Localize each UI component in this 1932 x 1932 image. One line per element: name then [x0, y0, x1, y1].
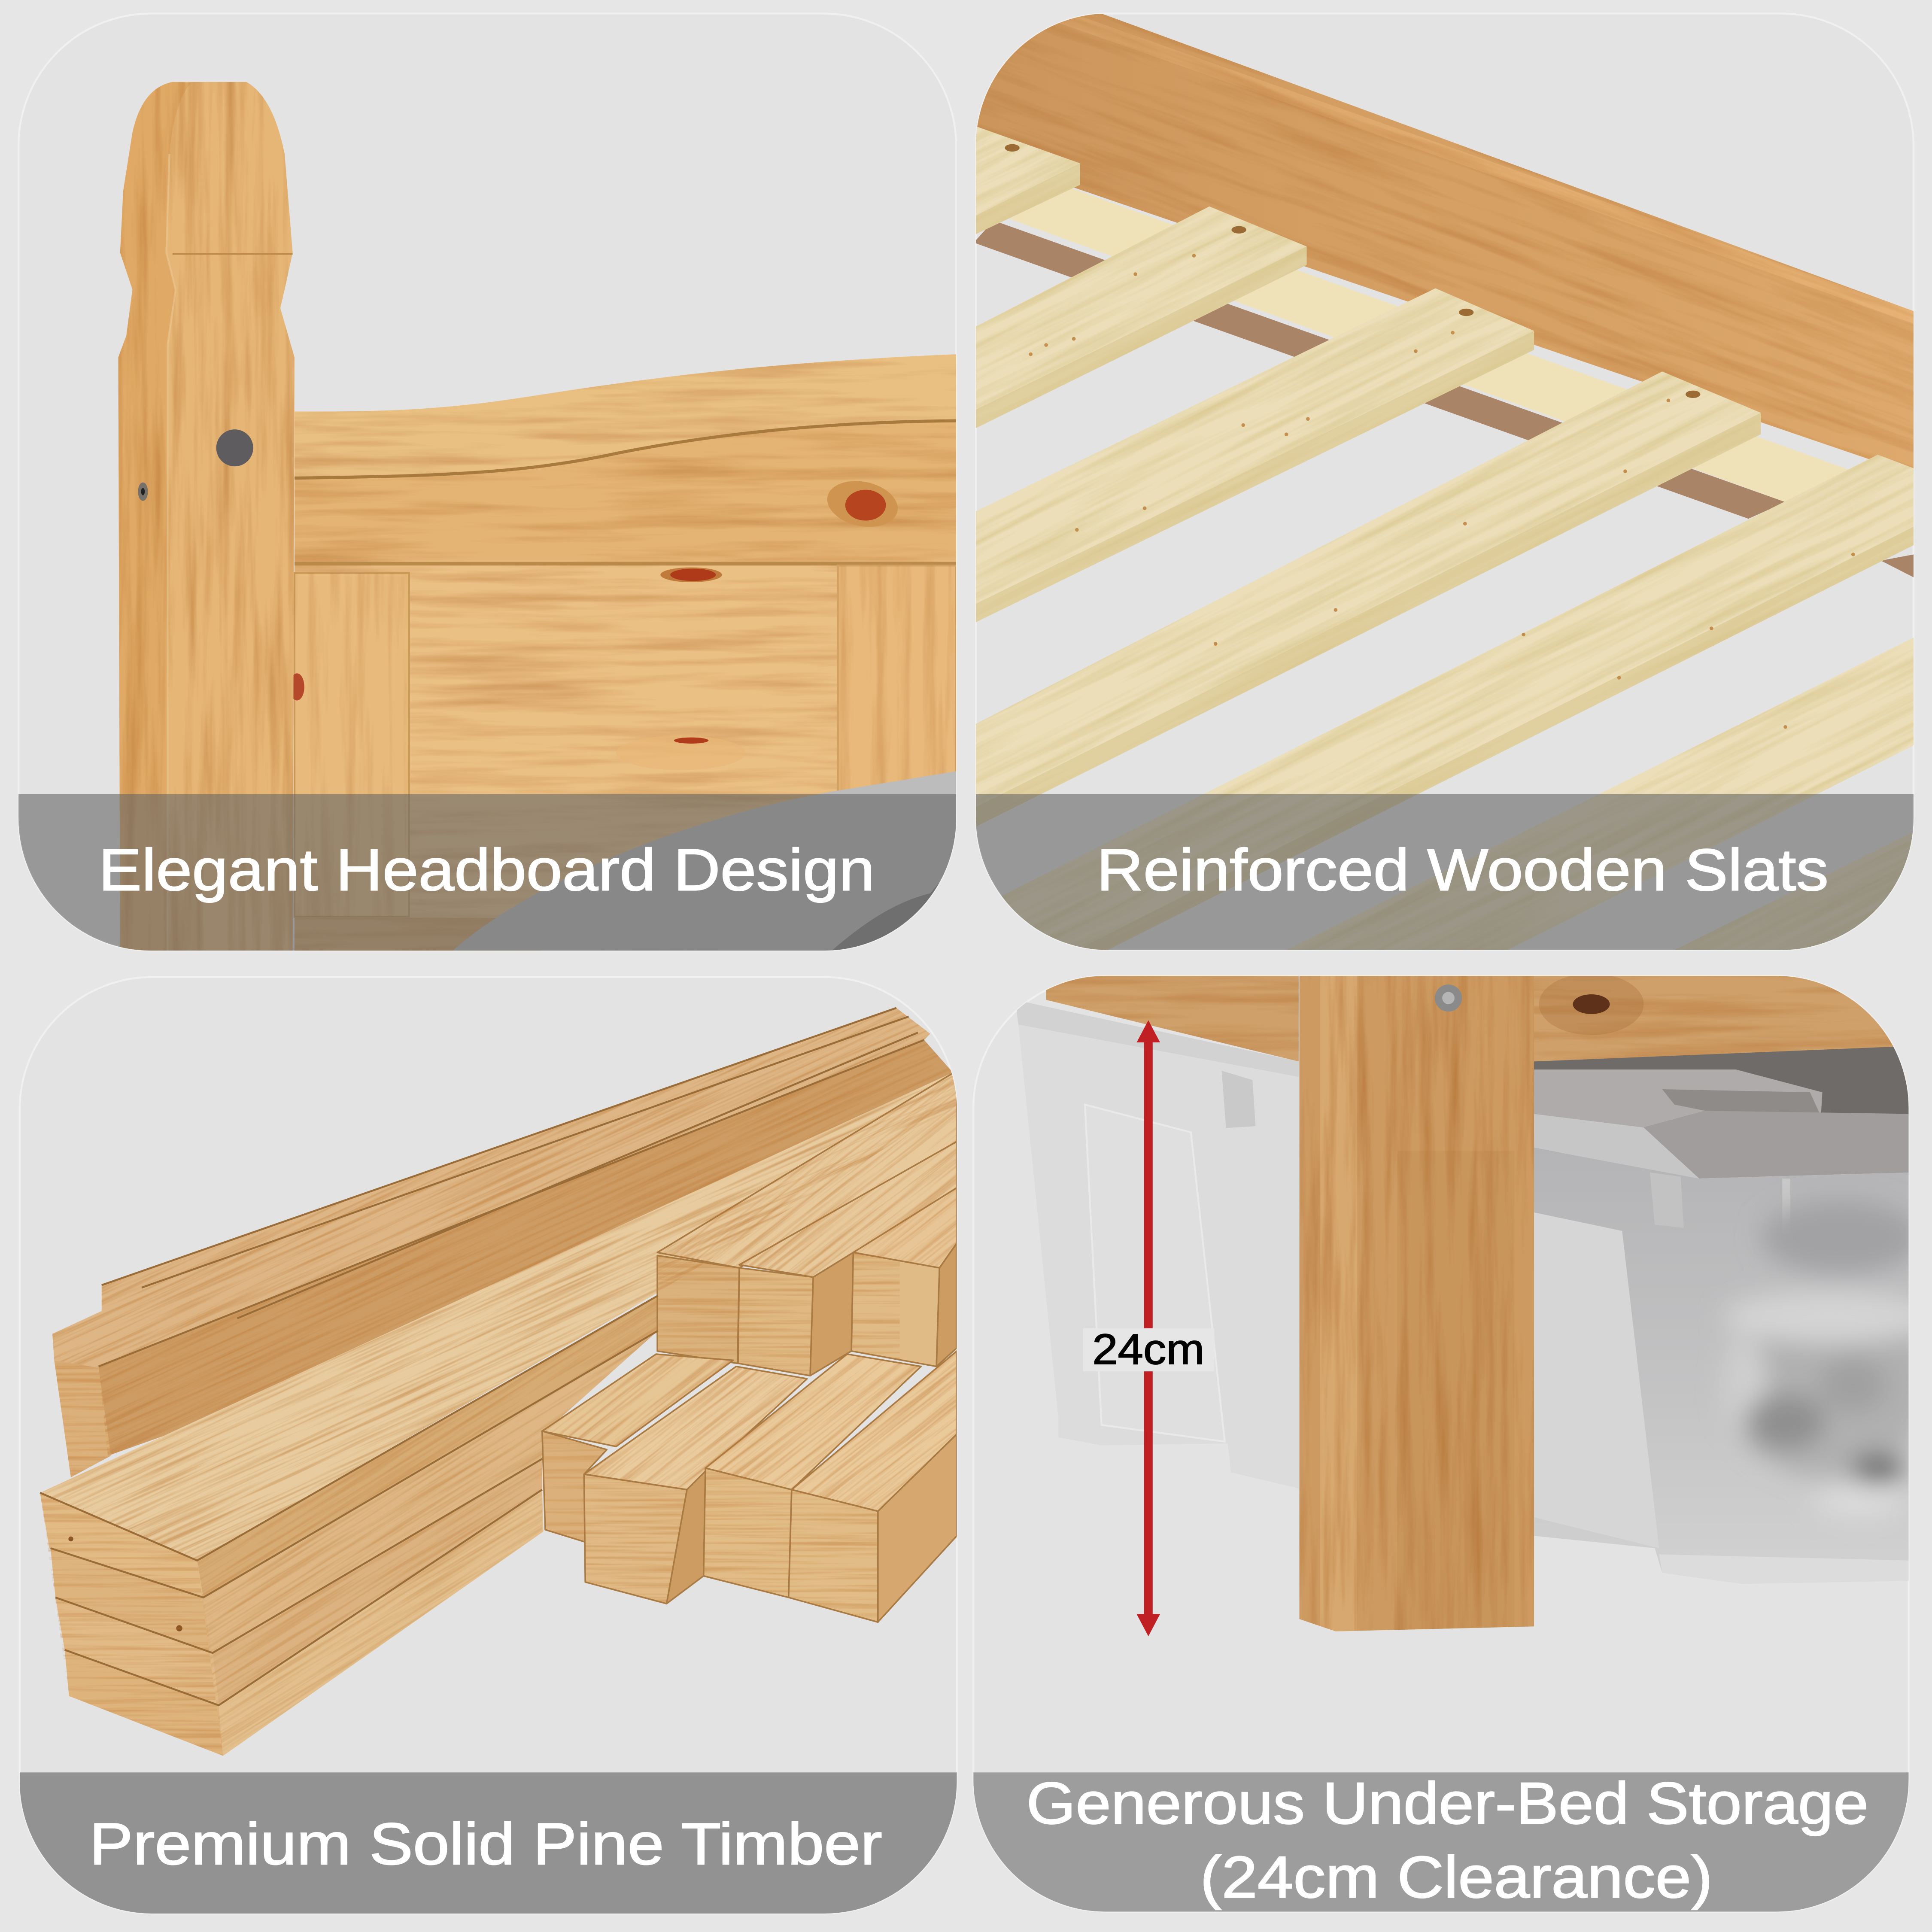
panel: wooden slats	[569, 0, 1932, 1321]
timber knot marks	[68, 1498, 908, 1631]
blurred box contents	[1724, 1200, 1932, 1517]
grain on plank sides	[0, 871, 1023, 1896]
panel frame stile left	[295, 573, 409, 917]
headboard top rail	[295, 354, 956, 477]
caption band	[973, 1772, 1908, 1912]
side rail	[796, 0, 1932, 689]
right post ends back row	[657, 1071, 957, 1376]
caption: slats: Reinforced Wooden Slats	[1097, 837, 1829, 903]
panel divider line	[295, 562, 956, 565]
caption band	[976, 794, 1914, 951]
main stacked planks	[40, 1071, 957, 1756]
box bottom rim	[1659, 1554, 1910, 1584]
icon: side screw	[138, 483, 148, 501]
bedpost	[117, 80, 297, 952]
caption: timber: Premium Solid Pine Timber	[89, 1811, 882, 1877]
bed side rail	[1027, 973, 1908, 1068]
panel: headboard design	[18, 14, 956, 952]
dimension arrow	[1136, 1020, 1160, 1636]
caption: headboard: Elegant Headboard Design	[99, 837, 875, 903]
brown ledge underside	[976, 221, 1914, 577]
wood knots	[289, 475, 902, 770]
icon: post bolt	[216, 429, 253, 466]
headboard lower rail	[295, 918, 541, 952]
grain on top faces	[0, 831, 1109, 1680]
caption band	[20, 1772, 957, 1914]
panel: pine timber	[0, 831, 1239, 1914]
caption: storage: (24cm Clearance)	[1200, 1844, 1713, 1911]
icon: leg bolt	[1435, 984, 1462, 1012]
panel frame stile right	[838, 565, 956, 812]
grey blanket	[453, 772, 956, 951]
storage box right	[1534, 1046, 1910, 1584]
back timber planks	[52, 1008, 957, 1477]
grain on plank and post ends	[37, 1249, 899, 1761]
slat wood specks	[1029, 254, 1855, 729]
icons: slat screws	[1005, 144, 1700, 398]
plank separation lines	[40, 1008, 924, 1705]
headboard upper panel	[295, 420, 956, 562]
headboard recessed panel	[295, 564, 956, 952]
caption band	[18, 794, 956, 951]
bed leg	[1299, 976, 1534, 1635]
panel: under-bed storage	[973, 973, 1932, 1912]
grain on headboard	[295, 345, 956, 952]
rail shadow line	[295, 421, 956, 478]
pale slat ledge	[1009, 188, 1853, 502]
caption: storage: Generous Under-Bed Storage	[1027, 1770, 1868, 1836]
right post ends front row	[542, 1351, 957, 1622]
storage box left	[1015, 1000, 1299, 1488]
grain on post tops	[363, 908, 1239, 1763]
wooden slats	[569, 0, 1932, 1321]
caption: storage	[1027, 1770, 1868, 1911]
dimension label: 24cm	[1092, 1325, 1204, 1373]
